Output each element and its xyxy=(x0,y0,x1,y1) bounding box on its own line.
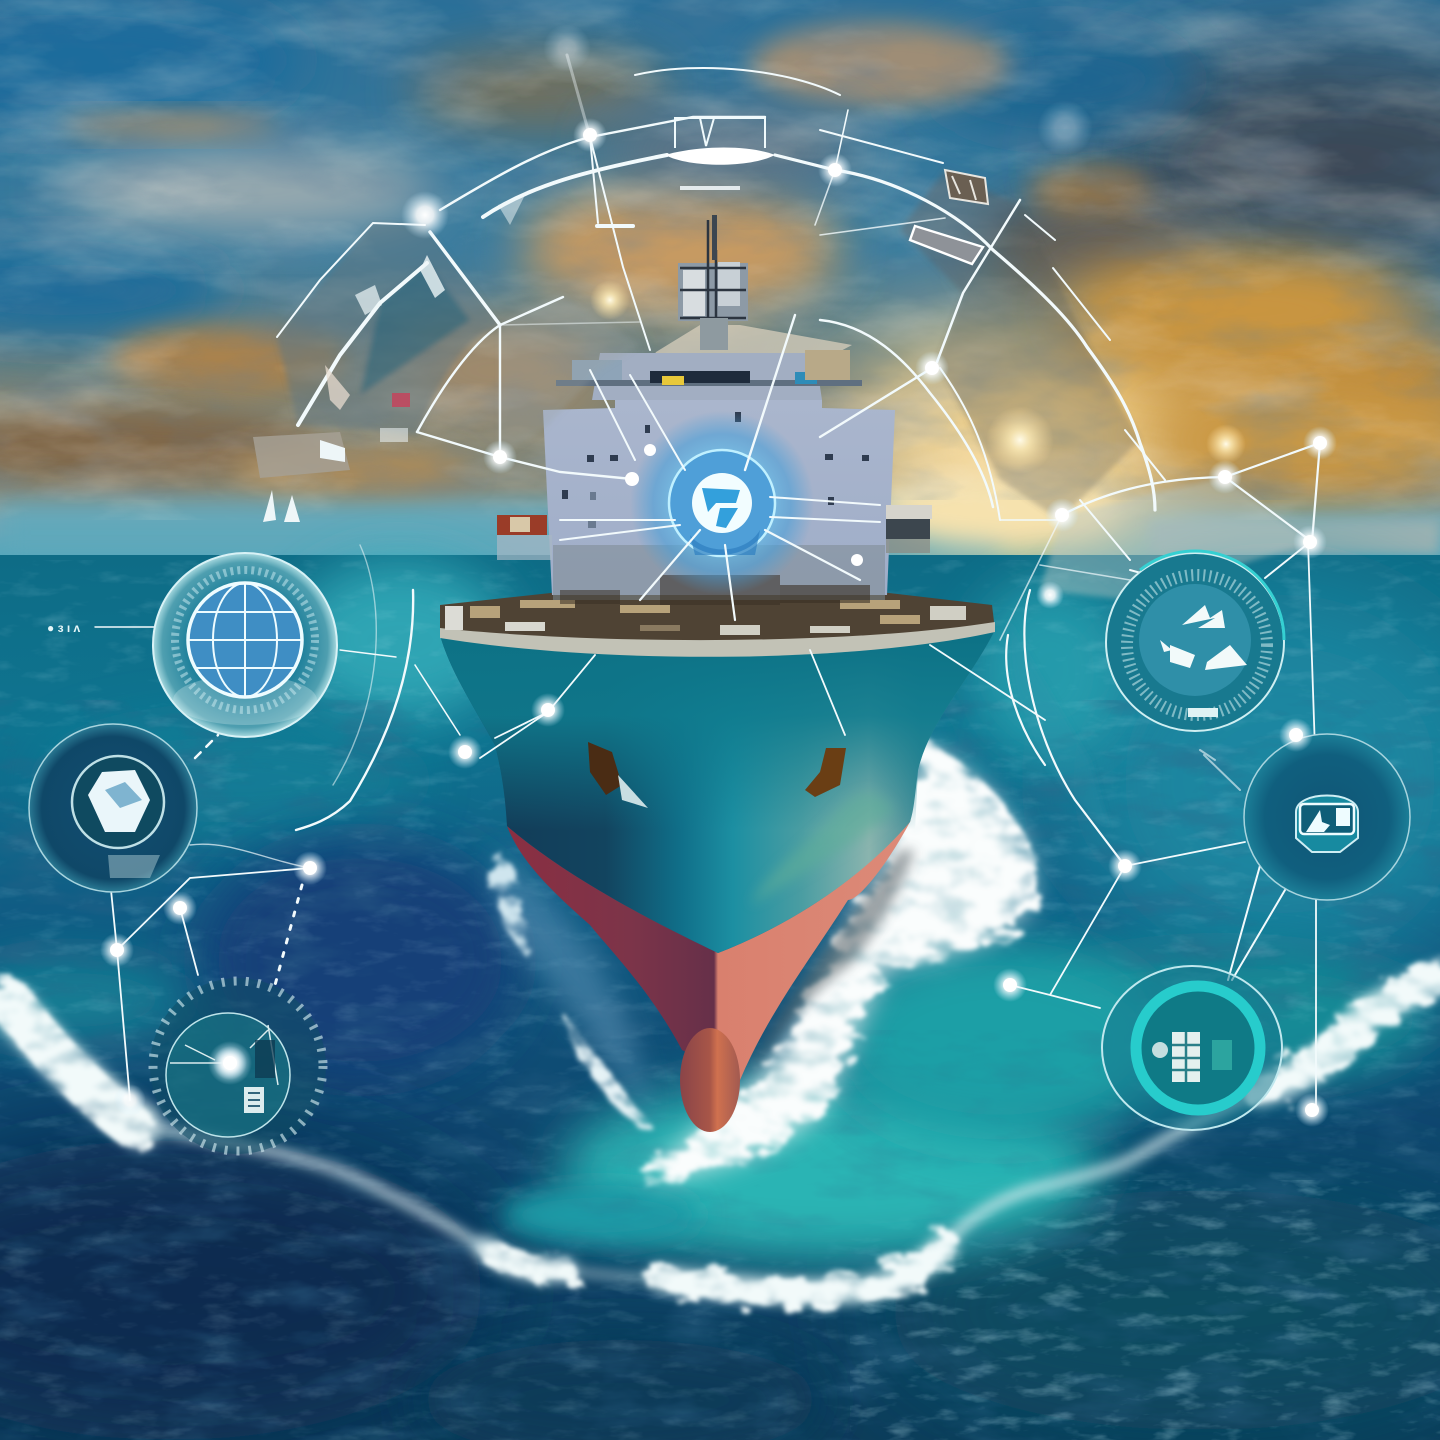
hull bow shadow on water xyxy=(745,850,915,1080)
bow wake soft base xyxy=(496,745,1032,1180)
white dash strip xyxy=(680,186,740,190)
right rounded panel xyxy=(910,226,983,264)
central glowing hub xyxy=(630,411,814,595)
breaking wave crest detail xyxy=(10,978,1440,1293)
breaking wave crest soft base xyxy=(10,978,1440,1292)
left hud label: ● ᴈ ı ᴧ xyxy=(47,621,81,635)
green waterline sheen xyxy=(750,792,895,905)
radar orb xyxy=(150,978,326,1154)
mast xyxy=(678,215,748,350)
turquoise wake water xyxy=(500,940,1170,1270)
ship xyxy=(440,215,995,1132)
sky background xyxy=(0,0,1440,570)
deck details xyxy=(445,600,966,635)
red boot hull xyxy=(507,820,911,1080)
globe orb xyxy=(153,553,337,737)
sea background xyxy=(0,555,1440,1440)
top rail frame xyxy=(675,118,765,148)
bridge house xyxy=(592,353,822,400)
antenna device xyxy=(945,170,988,204)
top bridge glyph xyxy=(665,148,775,165)
bow wake foam xyxy=(496,740,1038,1185)
left anchor xyxy=(588,742,622,795)
bridge wing right xyxy=(805,350,850,380)
block windows xyxy=(562,412,869,528)
left hud fragments xyxy=(253,195,525,522)
accommodation block xyxy=(543,400,895,595)
glowing network nodes xyxy=(100,24,1337,1127)
bridge wing left xyxy=(572,360,622,380)
right side structure xyxy=(886,505,932,553)
bridge windows xyxy=(650,371,817,384)
yellow mark xyxy=(662,376,684,385)
bridge wing deck xyxy=(556,380,862,386)
left side structure xyxy=(497,515,552,560)
cargo orb xyxy=(1106,551,1284,731)
ship icon orb xyxy=(29,724,197,892)
deck machinery xyxy=(440,592,995,642)
teal hull xyxy=(440,630,995,953)
lower block machinery xyxy=(553,545,885,600)
deck cabins xyxy=(560,575,870,605)
deck rail xyxy=(440,622,995,657)
bulbous bow xyxy=(680,1028,740,1132)
teal engine orb xyxy=(1102,966,1282,1130)
hud network arcs xyxy=(95,55,1320,1110)
left anchor streak xyxy=(618,775,648,808)
hud translucent panels xyxy=(277,170,1310,830)
monitor orb xyxy=(1244,734,1410,900)
beige tower base xyxy=(650,325,852,362)
right anchor xyxy=(805,748,846,797)
